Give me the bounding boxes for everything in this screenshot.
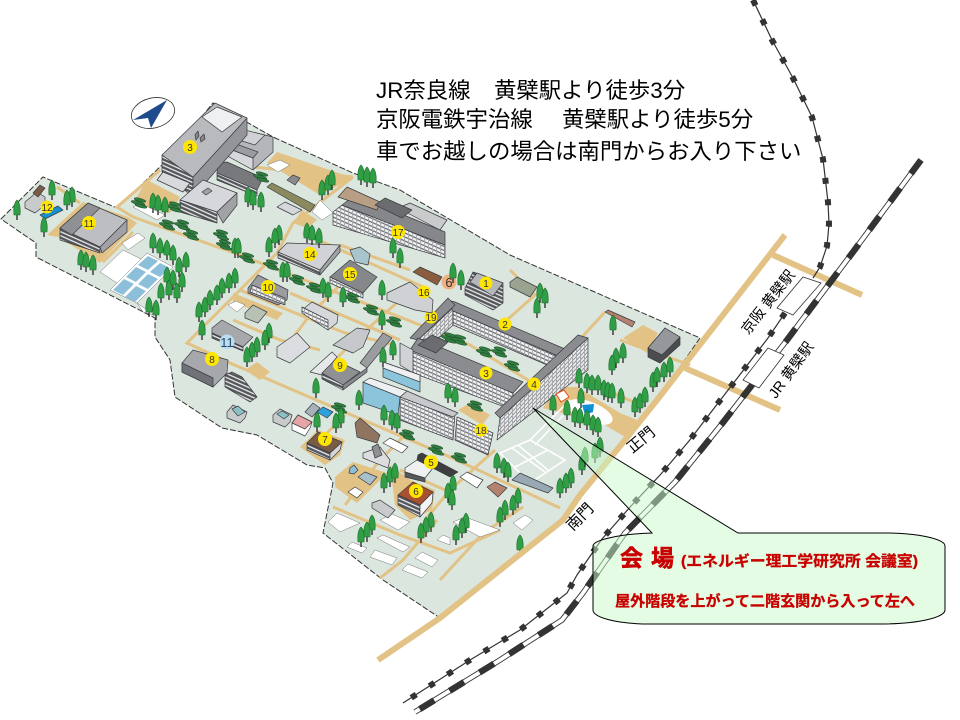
number 6 orange (442, 274, 456, 290)
number 8 (205, 352, 219, 366)
label: Keihan Obaku station: 京阪 黄檗駅 (738, 267, 799, 338)
access directions text: 黄檗駅より徒歩5分 (562, 107, 753, 132)
number 15: 15 (344, 270, 356, 281)
number 6 (409, 484, 423, 498)
number 7: 7 (322, 435, 328, 446)
building 14 (278, 243, 340, 275)
building 15 (330, 247, 377, 298)
venue title: 会 場 (620, 545, 674, 571)
roads (57, 167, 690, 580)
plazas (47, 152, 658, 520)
building 10 (248, 275, 288, 305)
number 10 (261, 280, 275, 294)
number 5 (424, 455, 438, 469)
white courts and parking lots (100, 160, 533, 578)
number 12 (40, 200, 54, 214)
boundary road (378, 235, 785, 660)
building 7 (307, 432, 342, 460)
number 9 (333, 358, 347, 372)
number 3 (top left) (183, 140, 197, 154)
JR Obaku station box (743, 348, 784, 388)
gate plaza oval (564, 394, 616, 430)
numbers on main complex: 18 (475, 426, 487, 437)
venue callout (533, 408, 945, 624)
north buildings (387, 267, 680, 363)
building 3 top left (157, 103, 315, 223)
number 10: 10 (262, 283, 274, 294)
numbers on main complex (424, 310, 540, 437)
number 3 (top left): 3 (187, 143, 193, 154)
number 11 (82, 216, 96, 230)
gate pavilion and blue sign (556, 390, 594, 415)
building 8 (182, 350, 257, 423)
small buildings south west (273, 403, 333, 436)
station road north (773, 255, 862, 295)
mid buildings (212, 302, 338, 363)
swimming pool (110, 253, 173, 303)
numbers 1 and 16: 16 (418, 288, 430, 299)
number 14: 14 (304, 250, 316, 261)
building 11 (60, 203, 127, 253)
tennis courts (500, 400, 575, 483)
number 9: 9 (337, 361, 343, 372)
Keihan railway line (403, 0, 829, 703)
number 5: 5 (428, 458, 434, 469)
compass (128, 93, 178, 133)
number 14 (303, 247, 317, 261)
JR railway line (415, 160, 921, 712)
building 17 (333, 187, 447, 258)
campus ground (1, 103, 700, 618)
building 9 (310, 328, 392, 390)
number 15 (343, 267, 357, 281)
venue directions: 屋外階段を上がって二階玄関から入って左へ (615, 592, 915, 610)
number 11 blue: 11 (220, 335, 234, 350)
building 12 with pond (25, 185, 63, 219)
number 17: 17 (392, 228, 404, 239)
number 7 (318, 432, 332, 446)
callout bubble (533, 408, 945, 624)
campus map (1, 93, 700, 618)
number 11: 11 (84, 219, 95, 230)
numbers on main complex: 4 (531, 380, 537, 391)
lower centre buildings (348, 418, 553, 518)
numbers on main complex: 2 (502, 320, 508, 331)
label: JR Obaku station: JR 黄檗駅 (765, 338, 818, 402)
access directions text: JR奈良線 (376, 78, 471, 103)
number 17 (391, 225, 405, 239)
numbers on main complex: 3 (483, 369, 489, 380)
Keihan Obaku station box (777, 277, 821, 315)
label: south gate: 南門 (563, 500, 597, 534)
number 6 orange: 6 (445, 275, 453, 290)
label: main gate: 正門 (624, 424, 659, 457)
numbers on main complex: 19 (425, 313, 437, 324)
access directions text: 黄檗駅より徒歩3分 (494, 78, 685, 103)
access directions text (376, 78, 801, 164)
access directions text: 車でお越しの場合は南門からお入り下さい (376, 139, 801, 164)
number 8: 8 (209, 355, 215, 366)
numbers 1 and 16: 1 (483, 279, 489, 290)
building 6 old house (398, 482, 433, 517)
station road south (685, 368, 780, 410)
venue subtitle: (エネルギー理工学研究所 会議室) (681, 552, 918, 570)
main laboratory complex (363, 298, 588, 455)
number 6: 6 (413, 487, 419, 498)
trees (14, 165, 673, 555)
number 12: 12 (41, 203, 53, 214)
access directions text: 京阪電鉄宇治線 (376, 107, 533, 132)
numbers 1 and 16 (418, 276, 492, 299)
pine bushes (131, 171, 520, 464)
